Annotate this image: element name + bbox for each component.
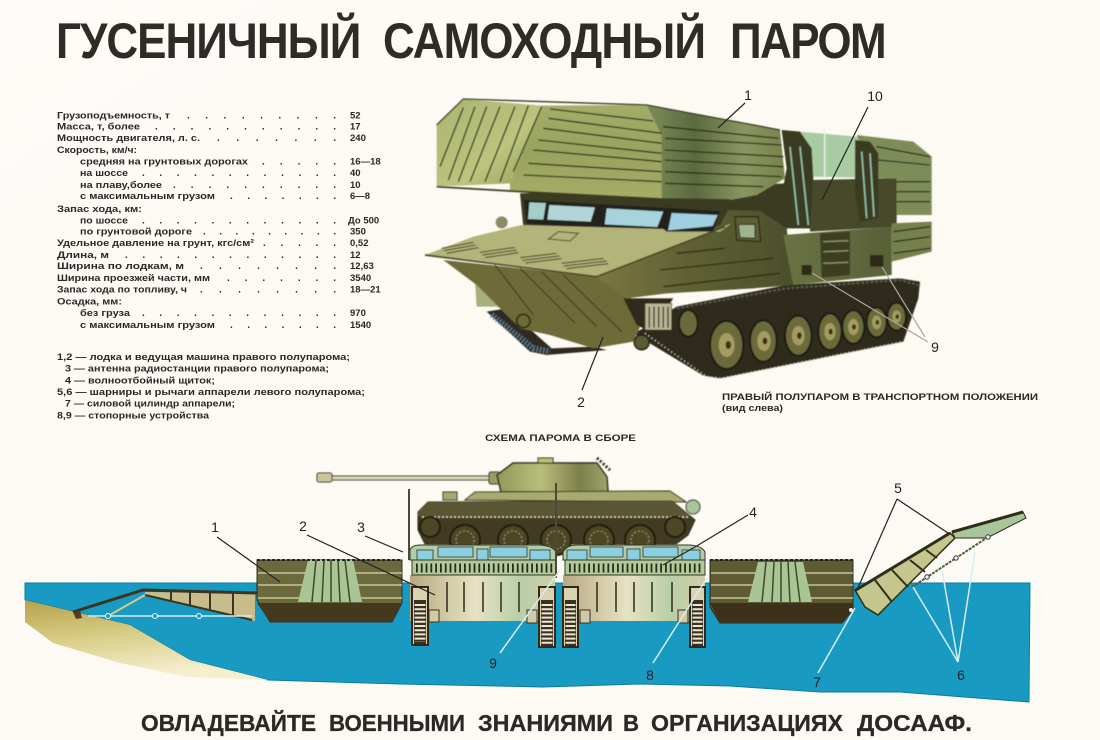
specifications table: без груза bbox=[80, 308, 131, 319]
specifications table: Осадка, мм: bbox=[57, 296, 122, 308]
tank bbox=[317, 458, 700, 555]
track and wheels bbox=[487, 278, 920, 378]
legend of numbered parts: 3 — антенна радиостанции правого полупарома; bbox=[65, 364, 329, 374]
footer slogan: ЗНАНИЯМИ bbox=[478, 710, 613, 736]
scheme callout 3: 3 bbox=[357, 519, 365, 535]
upper boat hull bbox=[437, 99, 785, 200]
legend of numbered parts: 7 — силовой цилиндр аппарели; bbox=[65, 398, 235, 410]
specifications table: 16—18 bbox=[350, 156, 381, 168]
specifications table: Длина, м bbox=[57, 250, 109, 261]
footer slogan bbox=[141, 709, 972, 736]
specifications table: . . . . . . . . . bbox=[203, 226, 336, 238]
specifications table: 240 bbox=[350, 133, 366, 144]
specifications table: . . . . . . . . bbox=[200, 284, 336, 296]
footer slogan: ОВЛАДЕВАЙТЕ bbox=[141, 709, 316, 736]
title: ГУСЕНИЧНЫЙ bbox=[56, 12, 361, 69]
specifications table: 1540 bbox=[350, 320, 371, 331]
scheme callout 7: 7 bbox=[813, 674, 821, 690]
specifications table: Запас хода по топливу, ч bbox=[57, 284, 187, 296]
specifications table: 17 bbox=[350, 122, 361, 132]
specifications table: Грузоподъемность, т bbox=[57, 110, 170, 122]
left boat bbox=[257, 560, 402, 622]
legend of numbered parts: 4 — волноотбойный щиток; bbox=[65, 376, 215, 386]
title bbox=[56, 12, 887, 69]
shadow behind cab bbox=[520, 183, 787, 232]
specifications table: с максимальным грузом bbox=[80, 191, 215, 202]
specifications table: 12,63 bbox=[350, 261, 374, 272]
specifications table: Ширина проезжей части, мм bbox=[57, 273, 210, 284]
specifications table: . . . . . . . . . . . . bbox=[142, 168, 336, 179]
title: ПАРОМ bbox=[730, 12, 887, 69]
specifications table: . . . . . . . bbox=[230, 320, 336, 331]
specifications table: 12 bbox=[350, 250, 361, 261]
callout number 2: 2 bbox=[577, 394, 585, 410]
caption: transport position: ПРАВЫЙ ПОЛУПАРОМ В ТРАНСПОРТНОМ ПОЛОЖЕНИИ bbox=[722, 391, 1038, 403]
specifications table bbox=[57, 110, 381, 331]
specifications table: . . . . . . . . . . . bbox=[155, 122, 336, 132]
central ferry machines bbox=[410, 545, 705, 647]
specifications table: . . . . . . . . . . . . bbox=[142, 216, 336, 226]
specifications table: До 500 bbox=[348, 216, 379, 226]
specifications table: средняя на грунтовых дорогах bbox=[80, 156, 249, 168]
scheme callout 1: 1 bbox=[211, 519, 219, 535]
heading: assembled ferry scheme: СХЕМА ПАРОМА В СБОРЕ bbox=[485, 433, 636, 444]
specifications table: Запас хода, км: bbox=[57, 204, 142, 215]
scheme callout 6: 6 bbox=[957, 667, 965, 683]
legend of numbered parts: 5,6 — шарниры и рычаги аппарели левого полупарома; bbox=[57, 387, 365, 398]
specifications table: Удельное давление на грунт, кгс/см² bbox=[57, 238, 254, 249]
specifications table: . . . . . . . . . bbox=[187, 110, 336, 122]
specifications table: 970 bbox=[350, 308, 366, 319]
bow deck bbox=[425, 216, 732, 277]
specifications table: по грунтовой дороге bbox=[80, 226, 192, 238]
specifications table: . . . . . . . . bbox=[200, 261, 336, 272]
scheme callout 8: 8 bbox=[646, 667, 654, 683]
side hull bbox=[597, 210, 793, 298]
specifications table: . . . . . . . bbox=[230, 191, 336, 202]
scheme callout 9: 9 bbox=[489, 655, 497, 671]
vertical track legs bbox=[412, 587, 705, 647]
specifications table: 18—21 bbox=[350, 284, 381, 296]
specifications table: . . . . . . . . . . bbox=[173, 180, 336, 191]
specifications table: 350 bbox=[350, 226, 366, 238]
rear superstructure bbox=[782, 130, 932, 285]
specifications table: Скорость, км/ч: bbox=[57, 145, 137, 156]
leader lines: ferry scheme bbox=[217, 499, 975, 673]
title: САМОХОДНЫЙ bbox=[383, 12, 706, 69]
footer slogan: В bbox=[623, 710, 639, 736]
hinge arms bbox=[782, 130, 878, 228]
legend of numbered parts: 8,9 — стопорные устройства bbox=[57, 410, 210, 422]
specifications table: . . . . . . . bbox=[217, 133, 336, 144]
specifications table: Мощность двигателя, л. с. bbox=[57, 133, 200, 144]
scheme callout 4: 4 bbox=[749, 504, 757, 520]
left ramp bbox=[73, 590, 257, 621]
specifications table: с максимальным грузом bbox=[80, 320, 215, 331]
specifications table: Масса, т, более bbox=[57, 122, 140, 132]
specifications table: 10 bbox=[350, 180, 361, 191]
footer slogan: ОРГАНИЗАЦИЯХ bbox=[651, 710, 844, 736]
left half machine bbox=[410, 545, 556, 621]
scheme callout 2: 2 bbox=[299, 518, 307, 534]
right boat bbox=[710, 560, 853, 623]
antennas bbox=[409, 483, 556, 578]
callout number 1: 1 bbox=[744, 87, 752, 103]
specifications table: Ширина по лодкам, м bbox=[57, 261, 184, 272]
lower bow hull bbox=[443, 260, 673, 350]
callout number 10: 10 bbox=[867, 88, 883, 104]
callout number 9: 9 bbox=[931, 339, 939, 355]
illustration: half-ferry in transport position bbox=[425, 99, 932, 378]
cab windows bbox=[524, 200, 720, 233]
specifications table: . . . . . . . . . . . . . bbox=[125, 250, 336, 261]
scheme callout 5: 5 bbox=[894, 480, 902, 496]
specifications table: 52 bbox=[350, 110, 361, 122]
specifications table: 6—8 bbox=[350, 191, 370, 202]
specifications table: . . . . . . . bbox=[227, 273, 336, 284]
caption: transport position: (вид слева) bbox=[722, 403, 783, 414]
water bbox=[25, 583, 1030, 702]
specifications table: 40 bbox=[350, 168, 361, 179]
specifications table: 3540 bbox=[350, 273, 371, 284]
footer slogan: ВОЕННЫМИ bbox=[329, 710, 465, 736]
specifications table: . . . . . bbox=[263, 238, 336, 249]
specifications table: 0,52 bbox=[350, 238, 368, 249]
right half machine bbox=[563, 545, 705, 621]
specifications table: по шоссе bbox=[80, 216, 128, 226]
specifications table: на шоссе bbox=[80, 168, 128, 179]
specifications table: . . . . . . . . . . . . bbox=[142, 308, 336, 319]
leader lines: top vehicle bbox=[582, 103, 928, 390]
footer slogan: ДОСААФ. bbox=[857, 710, 972, 736]
specifications table: на плаву,более bbox=[80, 180, 162, 191]
right ramp bbox=[848, 512, 1026, 615]
legend of numbered parts bbox=[57, 352, 365, 422]
legend of numbered parts: 1,2 — лодка и ведущая машина правого полупарома; bbox=[57, 352, 350, 363]
river bank bbox=[25, 600, 268, 680]
caption: transport position bbox=[722, 391, 1038, 414]
specifications table: . . . . . bbox=[262, 156, 336, 168]
